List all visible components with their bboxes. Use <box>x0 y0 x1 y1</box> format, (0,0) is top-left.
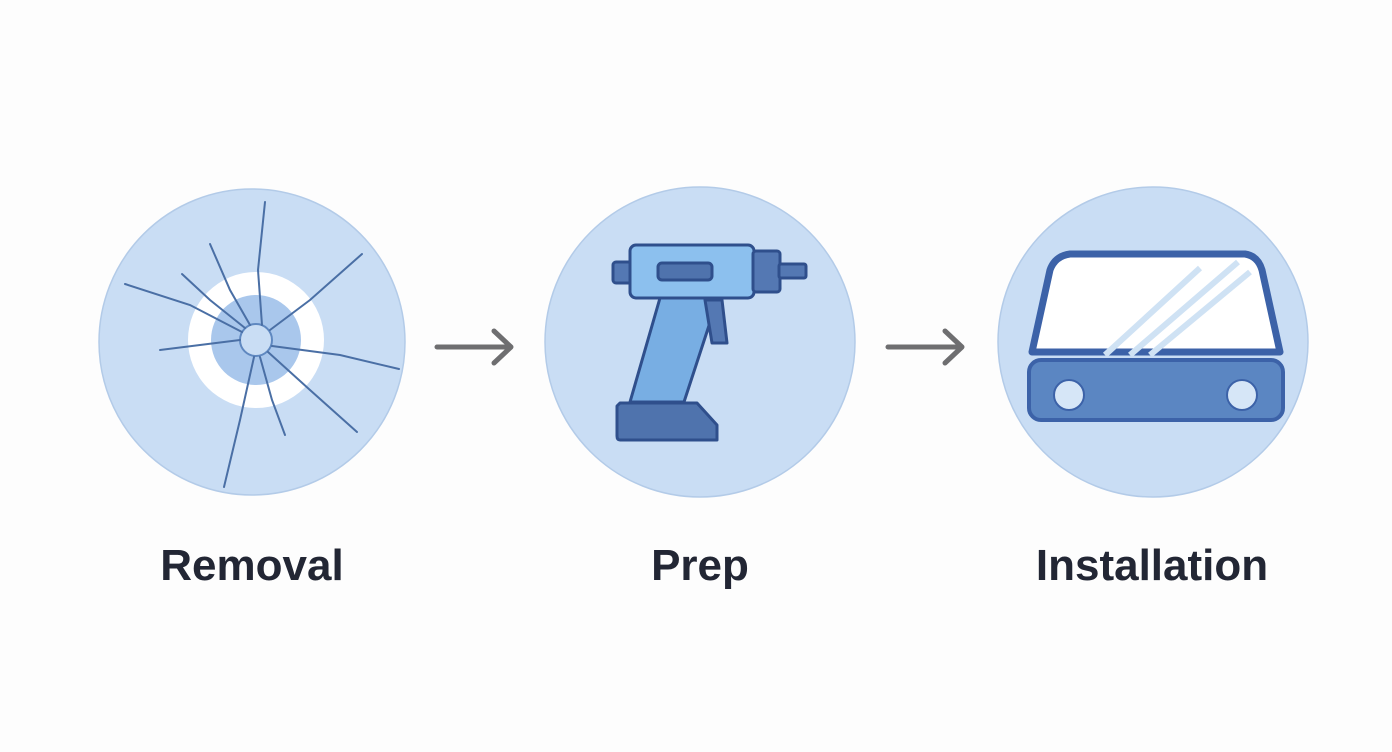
label: Removal: Removal <box>160 541 344 590</box>
label: Prep: Prep <box>651 541 749 590</box>
step 2 icon: drill <box>545 187 855 497</box>
step 3 icon: car windshield <box>998 187 1308 497</box>
arrow 1 <box>437 331 511 363</box>
step 1 icon: cracked glass <box>99 189 405 495</box>
arrow 2 <box>888 331 962 363</box>
label: Installation: Installation <box>1036 541 1268 590</box>
